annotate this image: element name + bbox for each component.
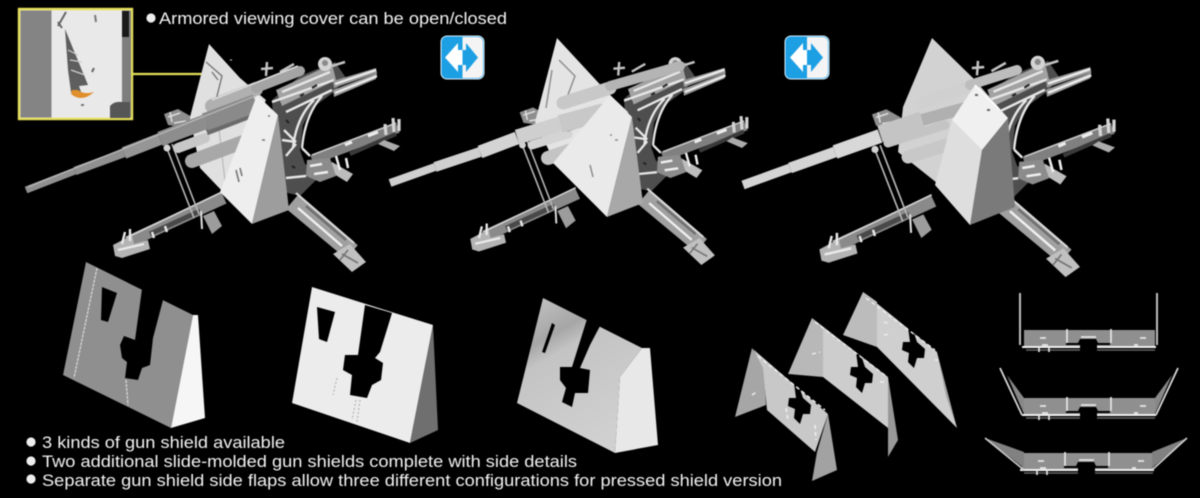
gun: shield version 3	[743, 38, 1115, 277]
side flap configuration 1 (front)	[735, 348, 837, 481]
yellow leader line	[132, 73, 205, 75]
side flap configuration 3 (rear)	[843, 292, 957, 428]
caption: viewing cover: Armored viewing cover can be open/closed	[159, 9, 507, 28]
gun shield C	[517, 298, 658, 453]
feature list: Separate gun shield side flaps allow three different configurations for pressed shield version	[42, 471, 782, 490]
inset: armored viewing cover detail	[19, 9, 132, 119]
feature list	[26, 433, 782, 490]
gun: shield version 1	[26, 44, 400, 272]
gun shield A	[63, 262, 205, 428]
feature list: Two additional slide-molded gun shields complete with side details	[42, 452, 577, 471]
top view: flaps angled	[1000, 368, 1178, 421]
side flap configuration 2 (middle)	[788, 318, 898, 457]
top view: flaps parallel	[1020, 293, 1157, 353]
swap icon 1	[441, 36, 484, 79]
gun shield B	[292, 287, 438, 443]
swap icon 2	[785, 36, 829, 79]
top view: flaps wide	[985, 438, 1187, 476]
feature list: 3 kinds of gun shield available	[42, 433, 285, 452]
gun: shield version 2	[390, 38, 748, 265]
